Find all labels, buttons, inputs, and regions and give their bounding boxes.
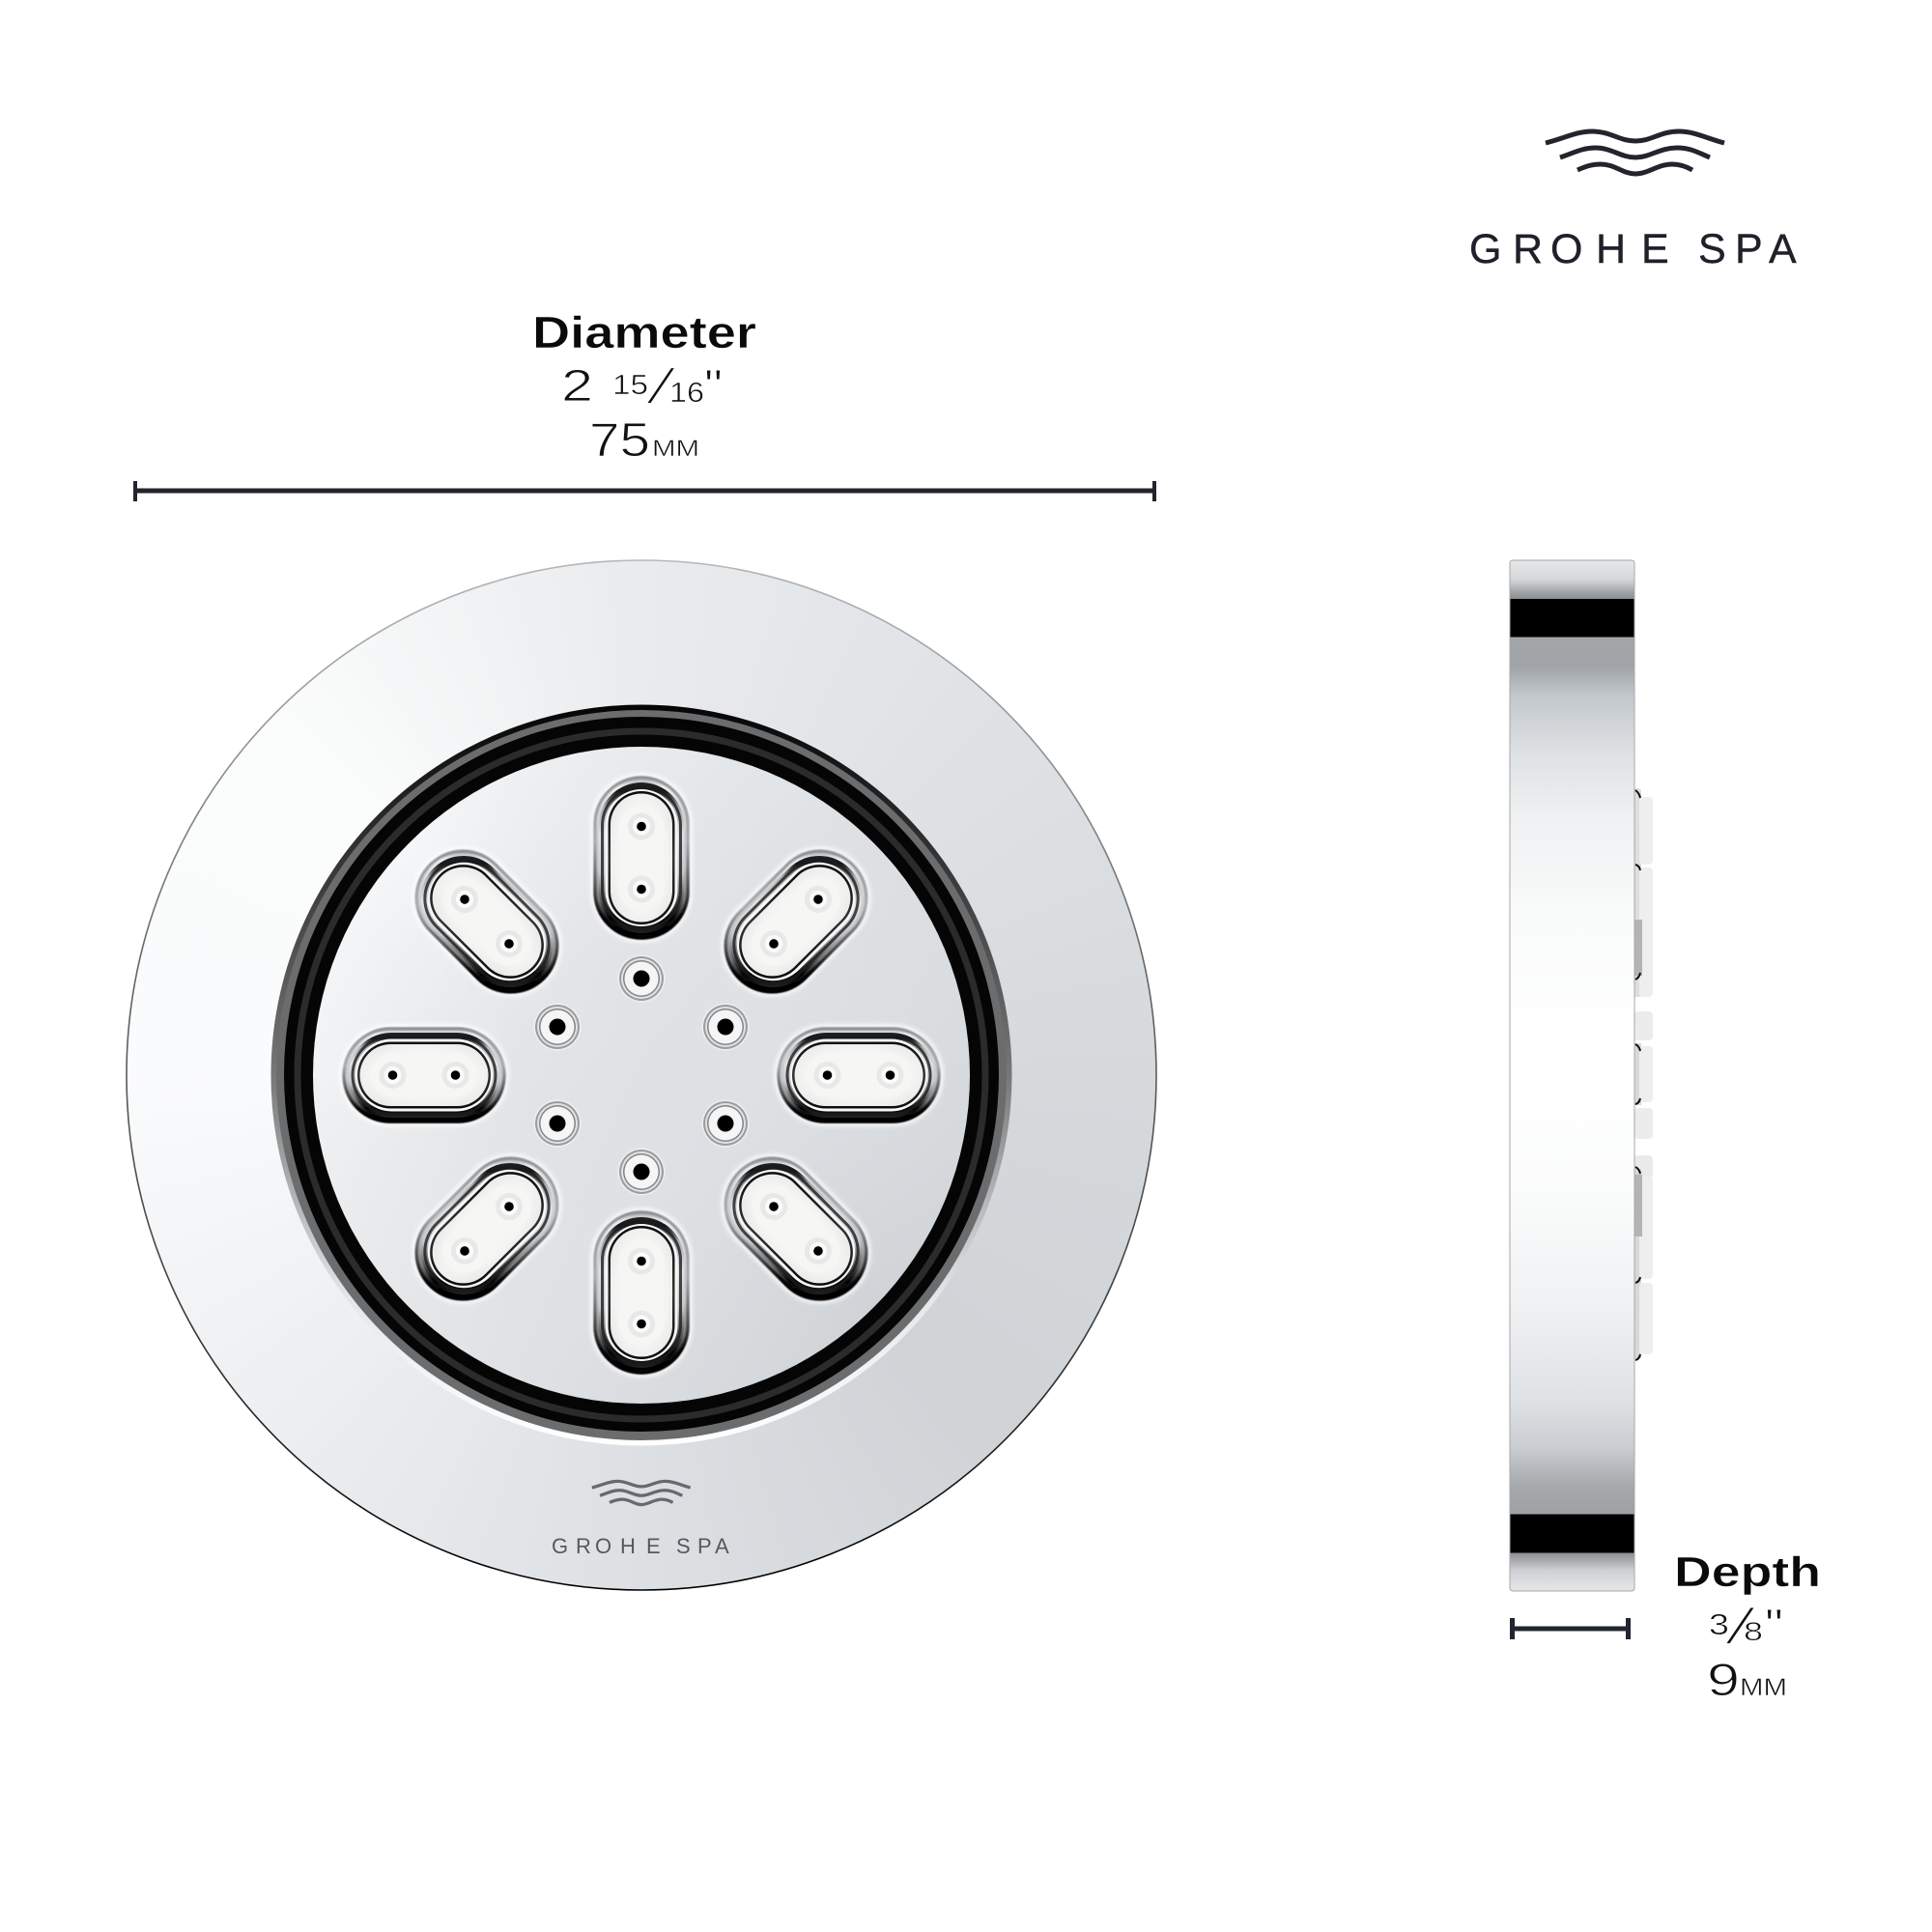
dimension: millimetres: 75 <box>589 414 650 467</box>
callout: depth <box>1510 1548 1821 1705</box>
small jet: lower left <box>534 1100 581 1147</box>
small jet: upper right <box>702 1004 749 1050</box>
panel: shower head front view <box>126 559 1157 1591</box>
logo wordmark: GROHE SPA <box>1469 226 1797 272</box>
panel: shower head side view <box>1509 560 1653 1592</box>
nozzle: upper left <box>390 825 583 1018</box>
nozzle: lower left <box>390 1132 583 1325</box>
heading: Diameter: Diameter <box>532 307 756 357</box>
engraved logo text: GROHE SPA <box>552 1534 729 1558</box>
dimension: inches: 2 <box>561 360 593 411</box>
spray nozzles and engraved logo <box>340 773 945 1558</box>
small jet: bottom <box>618 1149 665 1195</box>
side body <box>1510 560 1634 1591</box>
dimension: inches <box>561 360 723 414</box>
recessed spray plate <box>313 747 970 1404</box>
callout: diameter <box>133 307 1156 501</box>
dimension: inches <box>1709 1600 1783 1655</box>
dimension: inches: 15 <box>612 370 648 401</box>
nozzle: bottom <box>590 1208 693 1378</box>
protruding spray buttons <box>1633 788 1653 1360</box>
dimension: inches: 8 <box>1744 1617 1763 1646</box>
dimension: inches: 3 <box>1709 1607 1729 1641</box>
chrome faceplate disc <box>127 560 1156 1590</box>
heading: Depth: Depth <box>1674 1548 1821 1596</box>
nozzle: lower right <box>699 1132 893 1325</box>
nozzle: left <box>339 1024 509 1126</box>
dimension: millimetres: MM <box>1740 1674 1787 1701</box>
logo: GROHE SPA <box>1469 129 1797 272</box>
dimension: inches: / <box>1721 1600 1758 1655</box>
dimension: inches: " <box>1765 1600 1783 1650</box>
small jet: upper left <box>534 1004 581 1050</box>
dimension: inches: " <box>704 360 723 411</box>
dimension: inches: 16 <box>669 378 704 409</box>
dimension: millimetres <box>589 414 699 467</box>
black gasket ring <box>126 559 1157 1591</box>
nozzle: top <box>590 773 693 943</box>
dimension: millimetres: 9 <box>1707 1654 1740 1705</box>
small jet: top <box>618 955 665 1002</box>
dimension: inches: / <box>642 360 678 414</box>
nozzle: upper right <box>699 825 893 1018</box>
engraved logo waves <box>592 1481 691 1505</box>
arrow: depth measure bar <box>1510 1618 1631 1639</box>
dimension: millimetres: MM <box>652 436 699 462</box>
dimension: millimetres <box>1707 1654 1787 1705</box>
arrow: diameter measure bar <box>133 481 1156 501</box>
icon: waves <box>1546 131 1724 174</box>
nozzle: right <box>774 1024 944 1126</box>
small jet: lower right <box>702 1100 749 1147</box>
